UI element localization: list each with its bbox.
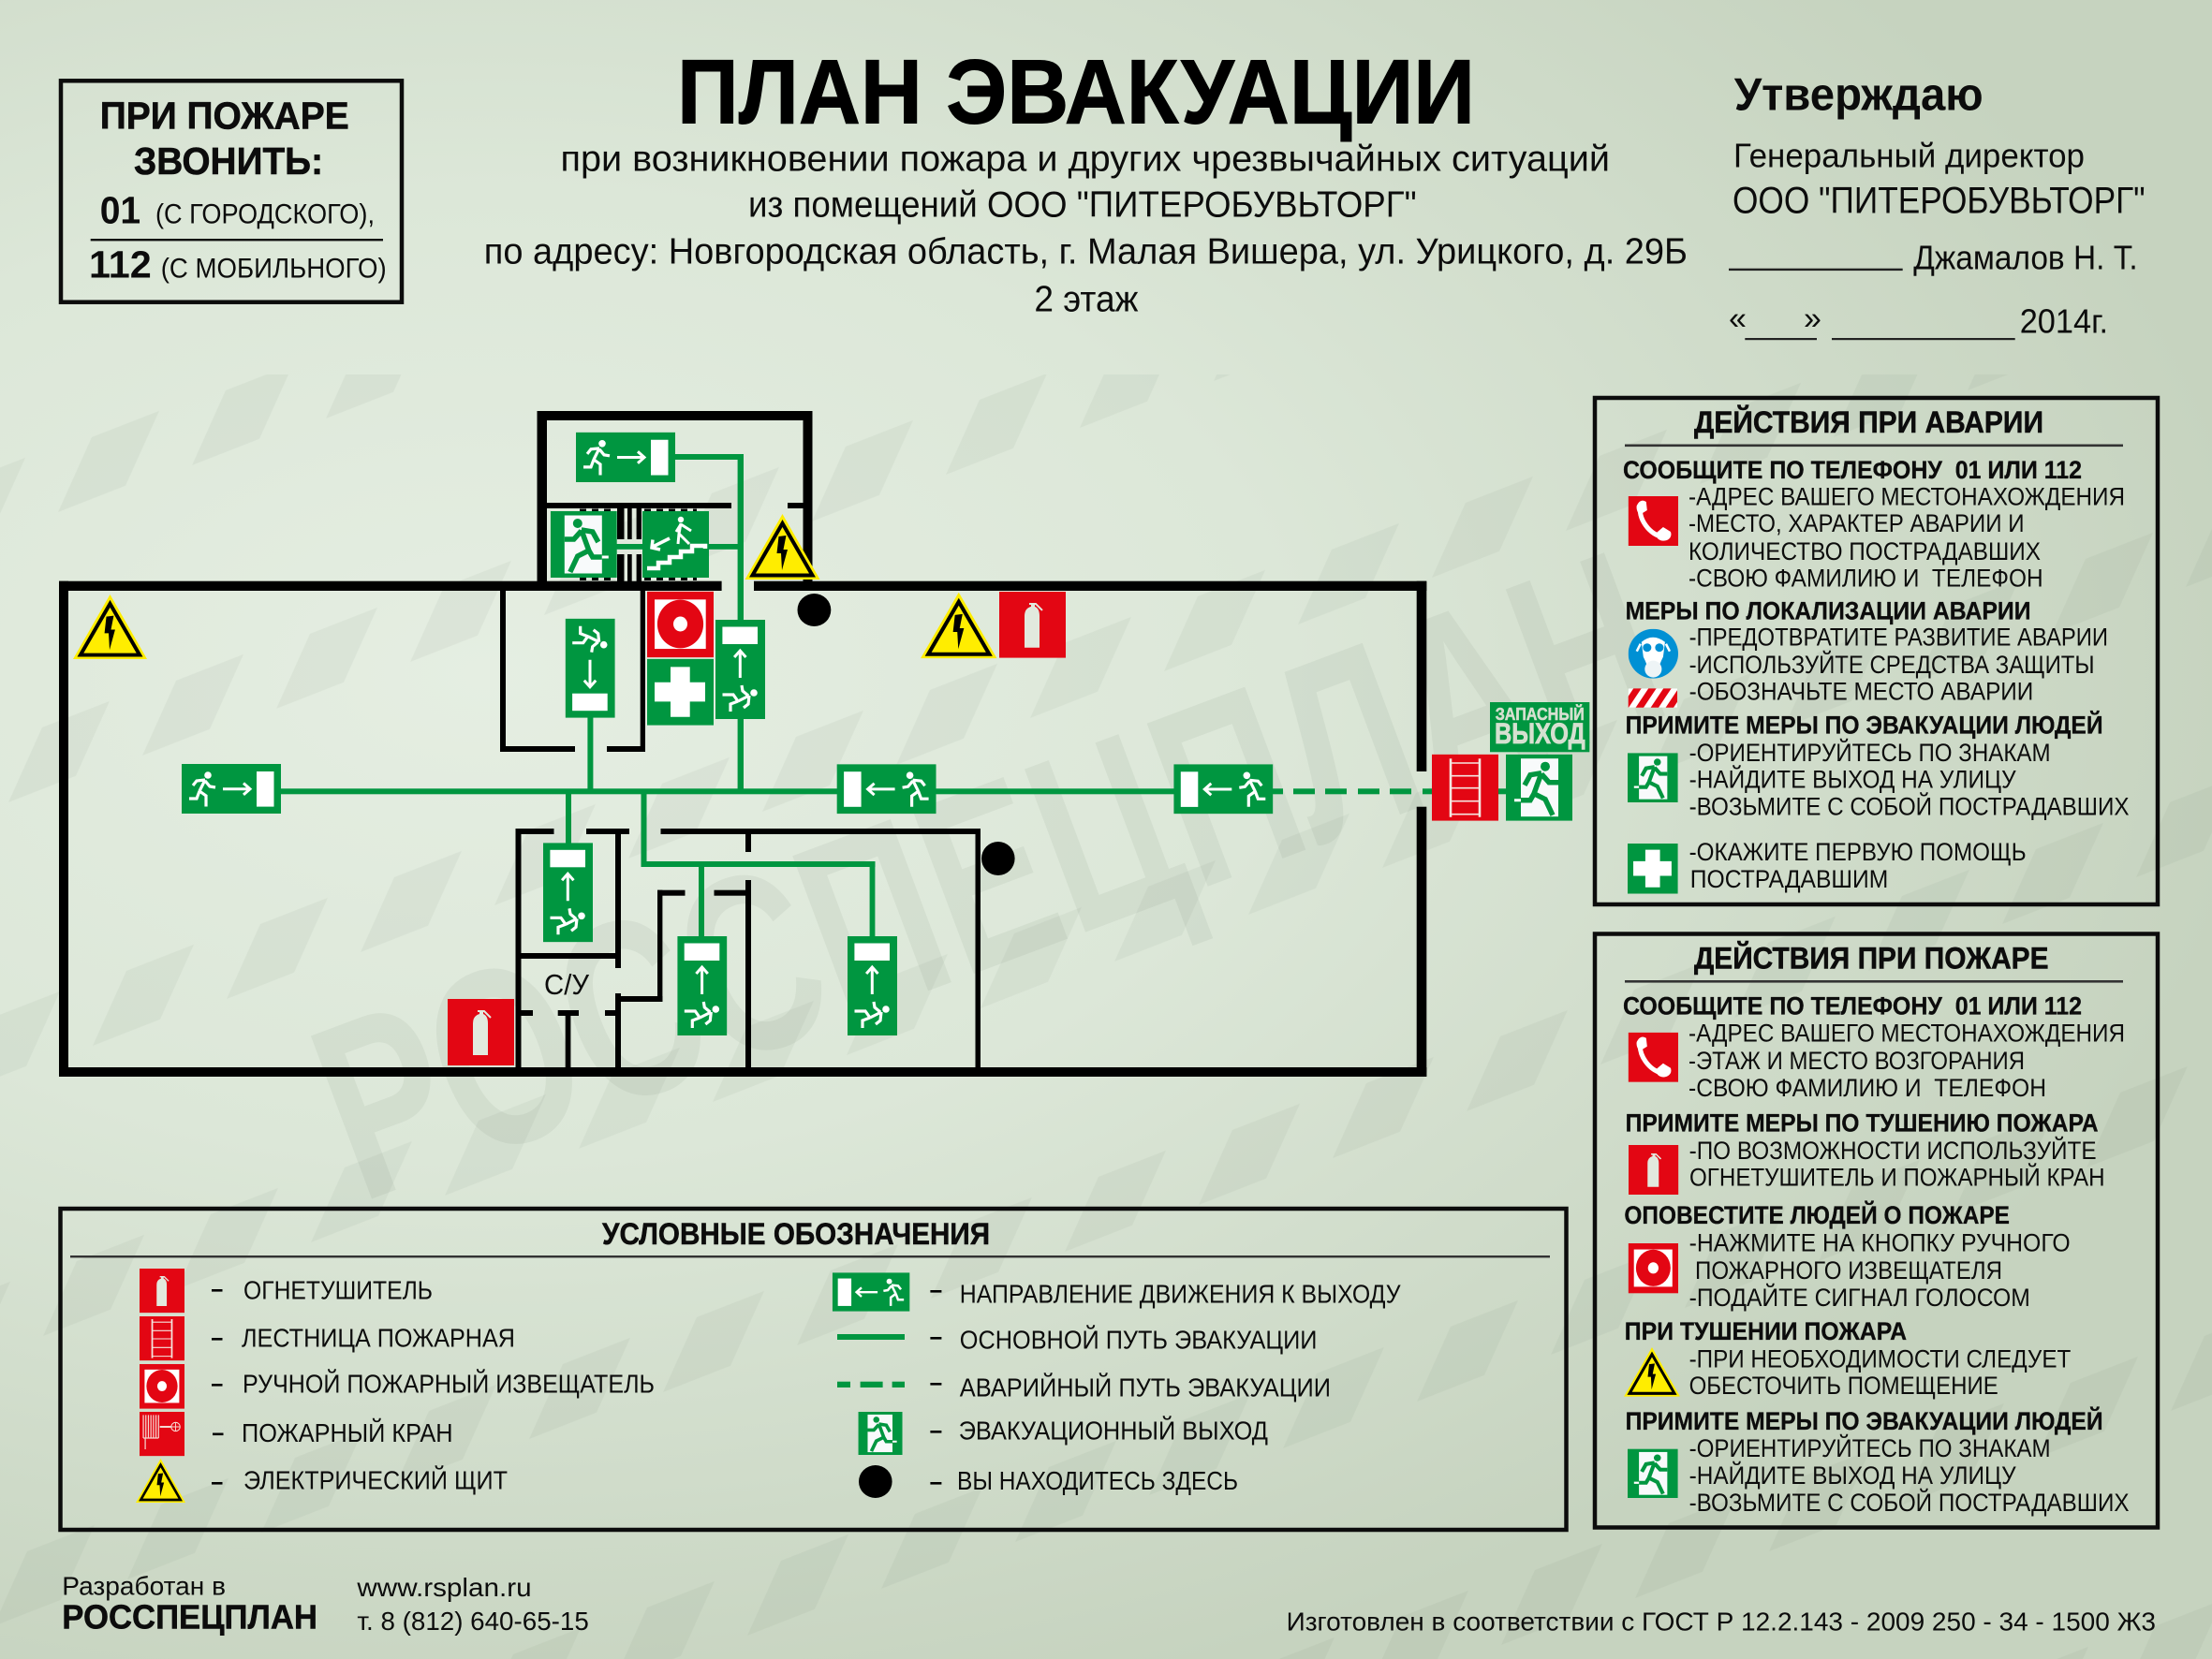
block: evacuate: -ВОЗЬМИТЕ С СОБОЙ ПОСТРАДАВШИХ [1689, 792, 2130, 821]
block: while extinguishing: -ПРИ НЕОБХОДИМОСТИ СЛЕДУЕТ [1689, 1345, 2071, 1373]
block: notify people [1624, 1200, 2071, 1312]
block: localise: МЕРЫ ПО ЛОКАЛИЗАЦИИ АВАРИИ [1626, 596, 2031, 624]
block: evacuate: -ВОЗЬМИТЕ С СОБОЙ ПОСТРАДАВШИХ [1689, 1488, 2130, 1517]
website: www.rsplan.ru [356, 1573, 532, 1602]
panel: fire phone numbers [61, 81, 402, 302]
block: first aid: -ОКАЖИТЕ ПЕРВУЮ ПОМОЩЬ [1689, 838, 2027, 866]
icon: gas mask [1629, 629, 1678, 679]
block: evacuate: -ОРИЕНТИРУЙТЕСЬ ПО ЗНАКАМ [1689, 738, 2051, 767]
sign: door down [566, 619, 615, 718]
legend: hydrant [140, 1412, 453, 1456]
footer: standard note: Изготовлен в соответствии с ГОСТ Р 12.2.143 - 2009 250 - 34 - 1500 Ж3 [1287, 1608, 2156, 1637]
block: while extinguishing [1625, 1317, 2071, 1400]
legend: manual alarm [140, 1364, 655, 1409]
sign: door up near stairs [715, 620, 765, 719]
icon: phone [1629, 1033, 1678, 1082]
title block [484, 41, 1688, 319]
walls [59, 411, 1426, 1077]
number 01: 01 [100, 188, 140, 231]
block: report by phone: СООБЩИТЕ ПО ТЕЛЕФОНУ 01 ИЛИ 112 [1623, 991, 2082, 1020]
block: notify people: ПОЖАРНОГО ИЗВЕЩАТЕЛЯ [1695, 1256, 2002, 1285]
sign: corridor right [1173, 764, 1273, 814]
sign: spare exit: ЗАПАСНЫЙ [1496, 704, 1585, 724]
block: evacuate: -НАЙДИТЕ ВЫХОД НА УЛИЦУ [1689, 764, 2016, 793]
block: evacuate: -ОРИЕНТИРУЙТЕСЬ ПО ЗНАКАМ [1689, 1433, 2051, 1462]
title: ПЛАН ЭВАКУАЦИИ [677, 41, 1475, 143]
legend: direction [833, 1272, 1401, 1312]
block: localise: -ПРЕДОТВРАТИТЕ РАЗВИТИЕ АВАРИИ [1689, 624, 2108, 652]
company logo text: РОССПЕЦПЛАН [62, 1597, 317, 1636]
sign: spare exit: ВЫХОД [1495, 716, 1585, 750]
sign: exit top stair [576, 433, 675, 482]
sign: room door 1 [543, 843, 593, 942]
landline note: (С ГОРОДСКОГО), [155, 198, 375, 229]
icon: first aid [647, 659, 714, 726]
block: report by phone: -МЕСТО, ХАРАКТЕР АВАРИИ И [1688, 509, 2025, 537]
sign: spare exit [1490, 702, 1589, 752]
block: report by phone [1623, 991, 2125, 1102]
panel: actions in fire [1595, 934, 2158, 1528]
heading: fire call: ПРИ ПОЖАРЕ [100, 95, 349, 138]
block: localise [1626, 596, 2108, 706]
icon: fire ladder [1432, 755, 1498, 821]
heading: ДЕЙСТВИЯ ПРИ ПОЖАРЕ [1694, 941, 2049, 975]
legend: main route: ОСНОВНОЙ ПУТЬ ЭВАКУАЦИИ [960, 1326, 1317, 1355]
developed by: Разработан в [62, 1571, 226, 1600]
block: evacuate: ПРИМИТЕ МЕРЫ ПО ЭВАКУАЦИИ ЛЮДЕЙ [1626, 711, 2103, 740]
company: ООО "ПИТЕРОБУВЬТОРГ" [1733, 181, 2146, 222]
subtitle line 4: 2 этаж [1034, 279, 1138, 319]
legend: ladder: ЛЕСТНИЦА ПОЖАРНАЯ [242, 1323, 515, 1352]
legend: extinguisher: ОГНЕТУШИТЕЛЬ [243, 1275, 433, 1304]
mobile note: (С МОБИЛЬНОГО) [161, 254, 387, 285]
icon: exit door [1506, 755, 1572, 821]
panel: legend [60, 1209, 1566, 1530]
panel: actions in emergency [1595, 398, 2158, 904]
legend: electric panel: ЭЛЕКТРИЧЕСКИЙ ЩИТ [243, 1466, 508, 1495]
icon: electric hazard [1624, 1347, 1680, 1397]
icon: hazard stripes [1628, 688, 1677, 708]
block: while extinguishing: ПРИ ТУШЕНИИ ПОЖАРА [1625, 1317, 1907, 1345]
icon: manual alarm [647, 592, 714, 657]
subtitle line 3: по адресу: Новгородская область, г. Малая Вишера, ул. Урицкого, д. 29Б [484, 232, 1688, 272]
you are here marker 2 [981, 842, 1015, 875]
footer: developer [62, 1571, 589, 1636]
room label: С/У [544, 968, 589, 1001]
approval block [1729, 69, 2146, 341]
number 112: 112 [89, 243, 152, 286]
legend: you are here: ВЫ НАХОДИТЕСЬ ЗДЕСЬ [957, 1466, 1238, 1495]
icon: electric panel upper room [921, 593, 996, 658]
block: first aid: ПОСТРАДАВШИМ [1690, 865, 1888, 893]
icon: extinguisher upper room [999, 592, 1066, 658]
date year: 2014г. [2020, 302, 2108, 341]
legend: extinguisher [140, 1269, 433, 1313]
sign: corridor centre [837, 764, 936, 814]
icon: first aid small [1628, 844, 1678, 894]
sign: corridor left [182, 764, 281, 814]
icon: extinguisher lower [448, 999, 514, 1065]
legend: electric panel [136, 1459, 508, 1503]
block: notify people: ОПОВЕСТИТЕ ЛЮДЕЙ О ПОЖАРЕ [1624, 1200, 2010, 1229]
block: evacuate: ПРИМИТЕ МЕРЫ ПО ЭВАКУАЦИИ ЛЮДЕЙ [1626, 1406, 2103, 1435]
legend: exit [859, 1412, 1268, 1455]
legend: emergency route [837, 1373, 1331, 1402]
heading: ДЕЙСТВИЯ ПРИ АВАРИИ [1694, 405, 2043, 439]
legend: manual alarm: РУЧНОЙ ПОЖАРНЫЙ ИЗВЕЩАТЕЛЬ [243, 1370, 655, 1399]
block: localise: -ИСПОЛЬЗУЙТЕ СРЕДСТВА ЗАЩИТЫ [1689, 650, 2095, 679]
block: report by phone [1623, 456, 2125, 592]
date quote close: » [1804, 301, 1821, 337]
sign: room door 3 [848, 936, 897, 1035]
legend: direction: НАПРАВЛЕНИЕ ДВИЖЕНИЯ К ВЫХОДУ [960, 1280, 1401, 1309]
heading: call: ЗВОНИТЬ: [134, 139, 323, 183]
block: localise: -ОБОЗНАЧЬТЕ МЕСТО АВАРИИ [1689, 678, 2033, 706]
block: report by phone: -СВОЮ ФАМИЛИЮ И ТЕЛЕФОН [1688, 1074, 2046, 1102]
block: notify people: -НАЖМИТЕ НА КНОПКУ РУЧНОГО [1689, 1229, 2071, 1257]
legend: hydrant: ПОЖАРНЫЙ КРАН [242, 1418, 453, 1447]
approval heading: Утверждаю [1734, 69, 1983, 120]
floor plan [59, 411, 1589, 1077]
sign: emergency exit in stairwell [551, 511, 617, 578]
icon: exit [1628, 753, 1678, 802]
block: extinguish: ОГНЕТУШИТЕЛЬ И ПОЖАРНЫЙ КРАН [1689, 1163, 2105, 1191]
block: first aid [1689, 838, 2027, 893]
block: extinguish: -ПО ВОЗМОЖНОСТИ ИСПОЛЬЗУЙТЕ [1689, 1136, 2097, 1165]
phone: т. 8 (812) 640-65-15 [357, 1607, 589, 1636]
block: evacuate: -НАЙДИТЕ ВЫХОД НА УЛИЦУ [1689, 1461, 2016, 1490]
subtitle line 2: из помещений ООО "ПИТЕРОБУВЬТОРГ" [748, 185, 1417, 226]
block: report by phone: -АДРЕС ВАШЕГО МЕСТОНАХОЖДЕНИЯ [1688, 483, 2125, 511]
sign: stair direction [642, 511, 709, 578]
legend: you are here [859, 1465, 1238, 1498]
block: evacuate [1626, 1406, 2130, 1517]
legend: emergency route: АВАРИЙНЫЙ ПУТЬ ЭВАКУАЦИИ [960, 1373, 1331, 1402]
block: report by phone: -АДРЕС ВАШЕГО МЕСТОНАХОЖДЕНИЯ [1688, 1019, 2125, 1047]
block: report by phone: КОЛИЧЕСТВО ПОСТРАДАВШИХ [1688, 537, 2041, 565]
block: report by phone: СООБЩИТЕ ПО ТЕЛЕФОНУ 01 ИЛИ 112 [1623, 456, 2082, 484]
block: while extinguishing: ОБЕСТОЧИТЬ ПОМЕЩЕНИЕ [1689, 1372, 1998, 1400]
legend: exit: ЭВАКУАЦИОННЫЙ ВЫХОД [959, 1416, 1268, 1445]
sign: room door 2 [677, 936, 727, 1035]
icon: electric panel left [73, 595, 147, 659]
block: report by phone: -ЭТАЖ И МЕСТО ВОЗГОРАНИЯ [1688, 1047, 2025, 1075]
legend: ladder [140, 1316, 515, 1360]
icon: manual alarm [1629, 1243, 1678, 1293]
block: evacuate [1626, 711, 2130, 821]
watermark: РОССПЕЦПЛАН [281, 498, 1695, 1254]
block: report by phone: -СВОЮ ФАМИЛИЮ И ТЕЛЕФОН [1688, 564, 2043, 592]
icon: electric panel at stair [745, 514, 820, 580]
icon: extinguisher [1629, 1145, 1678, 1195]
legend: main route [837, 1326, 1317, 1355]
icon: exit [1628, 1449, 1678, 1498]
position: Генеральный директор [1733, 136, 2085, 174]
evacuation routes [281, 454, 1507, 937]
block: notify people: -ПОДАЙТЕ СИГНАЛ ГОЛОСОМ [1689, 1283, 2030, 1312]
icon: phone [1629, 496, 1678, 546]
legend heading: УСЛОВНЫЕ ОБОЗНАЧЕНИЯ [602, 1217, 990, 1251]
director name: Джамалов Н. Т. [1913, 238, 2138, 276]
you are here marker 1 [798, 594, 831, 626]
block: extinguish [1626, 1108, 2105, 1191]
block: extinguish: ПРИМИТЕ МЕРЫ ПО ТУШЕНИЮ ПОЖАРА [1626, 1108, 2099, 1137]
subtitle line 1: при возникновении пожара и других чрезвычайных ситуаций [560, 139, 1610, 179]
stairs [580, 508, 697, 581]
date quotes: « [1729, 301, 1747, 337]
